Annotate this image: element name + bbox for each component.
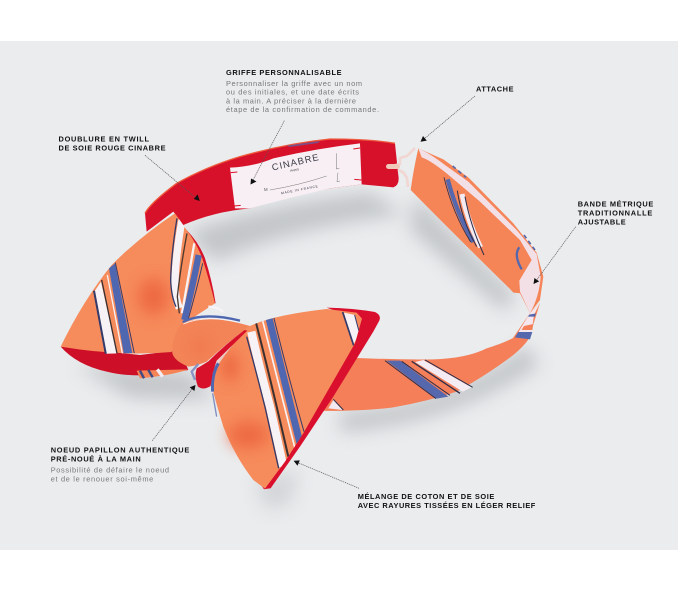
callout: griffe personnalisable: Personnaliser la griffe avec un nom (226, 79, 362, 88)
arrow: doublure (145, 155, 200, 201)
brand name: CINABRE (271, 152, 320, 173)
left wing underside (61, 347, 188, 375)
arrow: noeud (152, 385, 196, 441)
red fold at knot (196, 330, 247, 388)
callout: doublure: DOUBLURE EN TWILL (58, 135, 149, 144)
bow wings and knot (61, 213, 380, 489)
callout: melange: MÉLANGE DE COTON ET DE SOIE (358, 492, 494, 501)
knot (172, 307, 250, 380)
arrow: attache (420, 96, 475, 142)
soft shadows (75, 192, 540, 510)
callout: griffe personnalisable: ou des initiales, et une date écrits (226, 88, 359, 97)
left wing lower stripes (94, 282, 117, 355)
griffe label: PARIS (290, 167, 299, 173)
callout: doublure (58, 135, 166, 153)
callout: noeud papillon: et de le renouer soi-même (51, 475, 153, 484)
callout: noeud papillon: PRÉ-NOUÉ À LA MAIN (51, 454, 141, 463)
griffe label (230, 143, 362, 208)
callout: bande metrique: AJUSTABLE (578, 217, 626, 226)
callout: bande metrique (578, 200, 653, 226)
callout: attache: ATTACHE (476, 84, 514, 93)
left wing upper stripes (175, 220, 182, 308)
made in france: MADE IN FRANCE (281, 184, 319, 195)
right wing main stripes (251, 332, 283, 467)
red twill lining band (145, 139, 399, 232)
callout: bande metrique: TRADITIONNALLE (578, 208, 652, 218)
right wing (210, 308, 380, 489)
callout: griffe personnalisable: étape de la confirmation de commande. (226, 105, 379, 114)
left wing (61, 213, 215, 355)
griffe label: M (264, 187, 268, 192)
callout: doublure: DE SOIE ROUGE CINABRE (58, 144, 166, 153)
arrow: bande (534, 227, 576, 284)
arrow: griffe (250, 121, 284, 184)
arrow: melange (294, 460, 359, 488)
callout: melange (358, 492, 536, 510)
metal hook fastener (386, 148, 415, 187)
callout: griffe personnalisable: GRIFFE PERSONNALISABLE (226, 68, 342, 77)
neck band: right section with adjustable metric strip (411, 148, 543, 313)
neck band: lower striped section (310, 303, 540, 411)
callout: griffe personnalisable (226, 68, 379, 114)
callout: noeud papillon: Possibilité de défaire le noeud (51, 466, 169, 475)
callout: noeud papillon (51, 445, 189, 484)
right wing corner stripes (344, 313, 359, 345)
left wing edge (187, 230, 216, 303)
callout: melange: AVEC RAYURES TISSÉES EN LÉGER RELIEF (358, 501, 536, 510)
callout: griffe personnalisable: à la main. A préciser à la dernière (226, 96, 356, 105)
callout: bande metrique: BANDE MÉTRIQUE (578, 200, 653, 209)
callout: noeud papillon: NOEUD PAPILLON AUTHENTIQUE (51, 445, 189, 454)
